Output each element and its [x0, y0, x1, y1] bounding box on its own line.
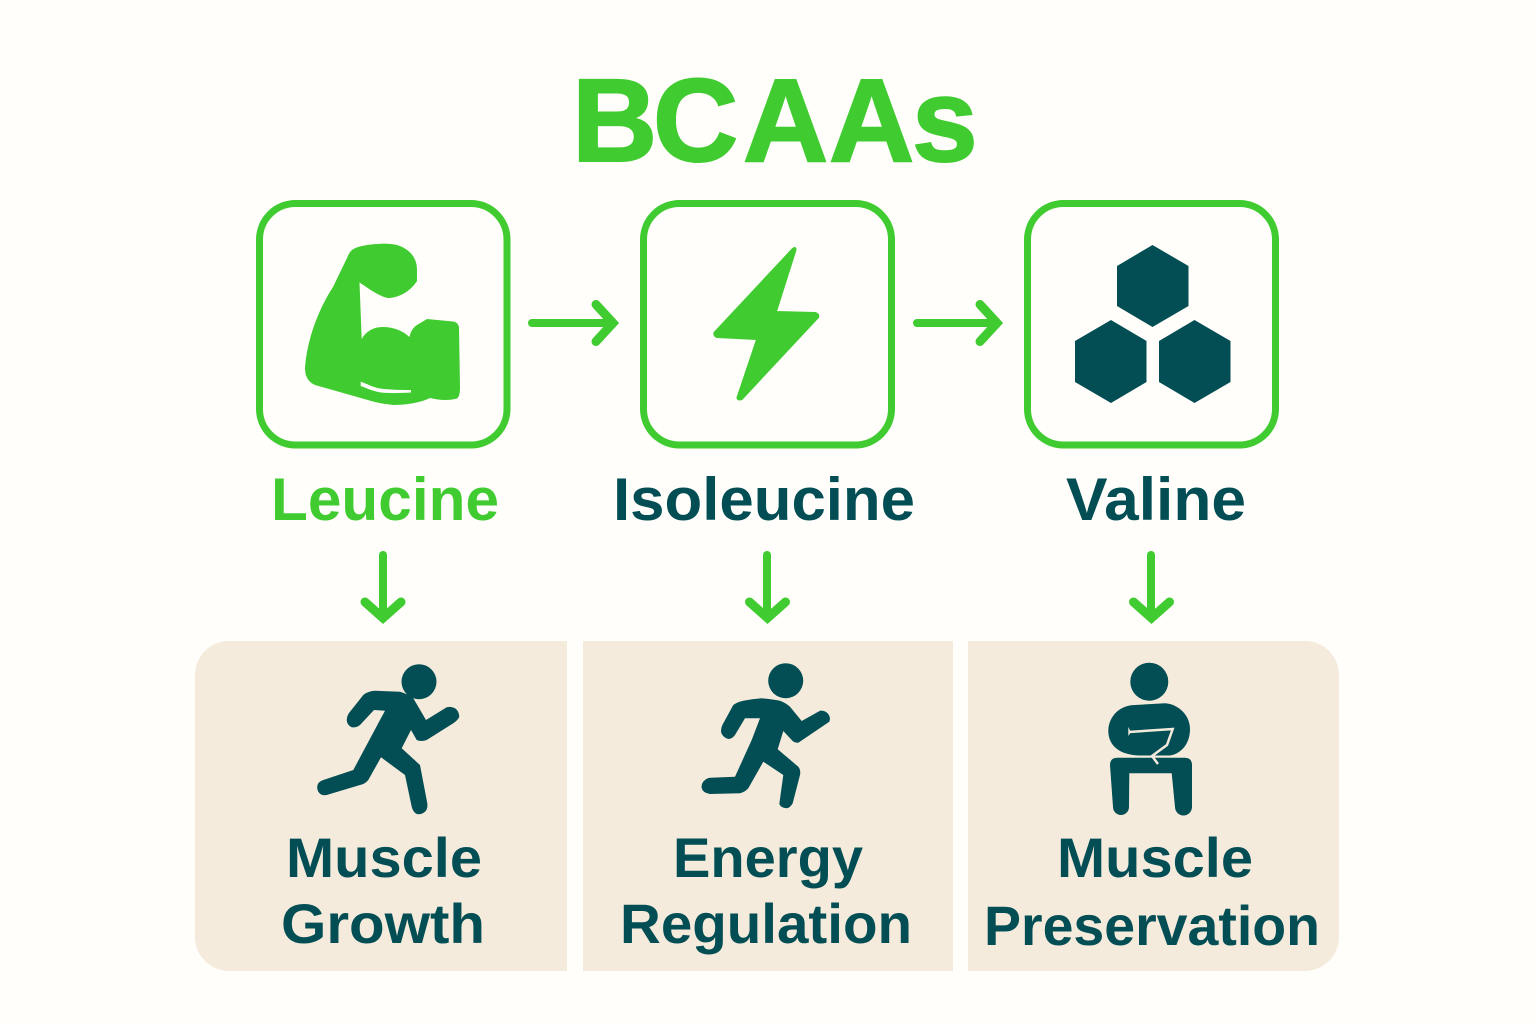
- title: BCAAs: [572, 55, 978, 187]
- text: Energy Regulation: Regulation: [620, 892, 912, 955]
- text: Muscle Preservation: Preservation: [984, 894, 1320, 957]
- panel: Valine icon box: [1028, 204, 1276, 445]
- text: Muscle Preservation: [984, 826, 1320, 957]
- icon: runner: [317, 664, 459, 814]
- panel: Muscle Preservation: [968, 641, 1339, 971]
- icon: flexed arm: [305, 244, 460, 405]
- arrow: Valine down: [1134, 555, 1170, 618]
- label: Valine: Valine: [1066, 466, 1246, 533]
- icon: hexagons: [1075, 245, 1230, 403]
- panel: Energy Regulation: [583, 641, 953, 971]
- label: Isoleucine: Isoleucine: [613, 466, 915, 533]
- label: Leucine: Leucine: [271, 466, 499, 533]
- arrow: Isoleucine down: [750, 555, 786, 618]
- icon: runner: [702, 663, 830, 808]
- arrow: Isoleucine to Valine: [917, 304, 997, 342]
- text: Muscle Growth: Muscle: [286, 826, 482, 889]
- arrow: Leucine to Isoleucine: [532, 304, 613, 342]
- icon: lightning bolt: [714, 248, 819, 400]
- text: Muscle Growth: [281, 826, 485, 955]
- text: Energy Regulation: Energy: [673, 826, 863, 889]
- text: Muscle Preservation: Muscle: [1057, 826, 1253, 889]
- arrow: Leucine down: [365, 555, 401, 618]
- text: Muscle Growth: Growth: [281, 892, 485, 955]
- panel: Leucine icon box: [260, 204, 507, 445]
- panel: Isoleucine icon box: [644, 204, 892, 445]
- panel: Muscle Growth: [195, 641, 567, 971]
- icon: seated person: [1108, 663, 1192, 816]
- text: Energy Regulation: [620, 826, 912, 955]
